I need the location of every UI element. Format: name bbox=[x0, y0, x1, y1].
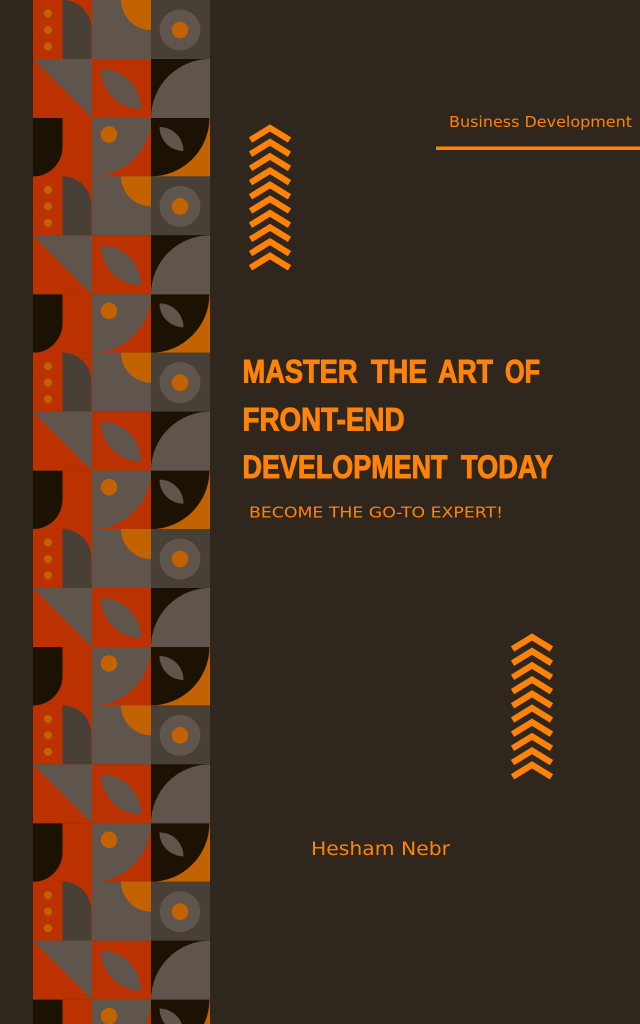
title: MASTER bbox=[242, 354, 358, 390]
author name: Hesham Nebr bbox=[311, 838, 450, 860]
title bbox=[242, 354, 553, 485]
category label: Business Development bbox=[449, 113, 632, 131]
subtitle: BECOME THE GO-TO EXPERT! bbox=[249, 504, 503, 522]
title: FRONT-END bbox=[242, 402, 404, 438]
title: THE bbox=[371, 354, 427, 390]
icon: lower chevron stack bbox=[512, 637, 552, 777]
title: TODAY bbox=[461, 449, 553, 485]
title: OF bbox=[505, 354, 540, 390]
title: DEVELOPMENT bbox=[242, 449, 448, 485]
panel: geometric pattern strip bbox=[33, 0, 210, 1024]
category underline bbox=[436, 146, 640, 150]
icon: upper chevron stack bbox=[250, 128, 290, 268]
title: ART bbox=[438, 354, 493, 390]
